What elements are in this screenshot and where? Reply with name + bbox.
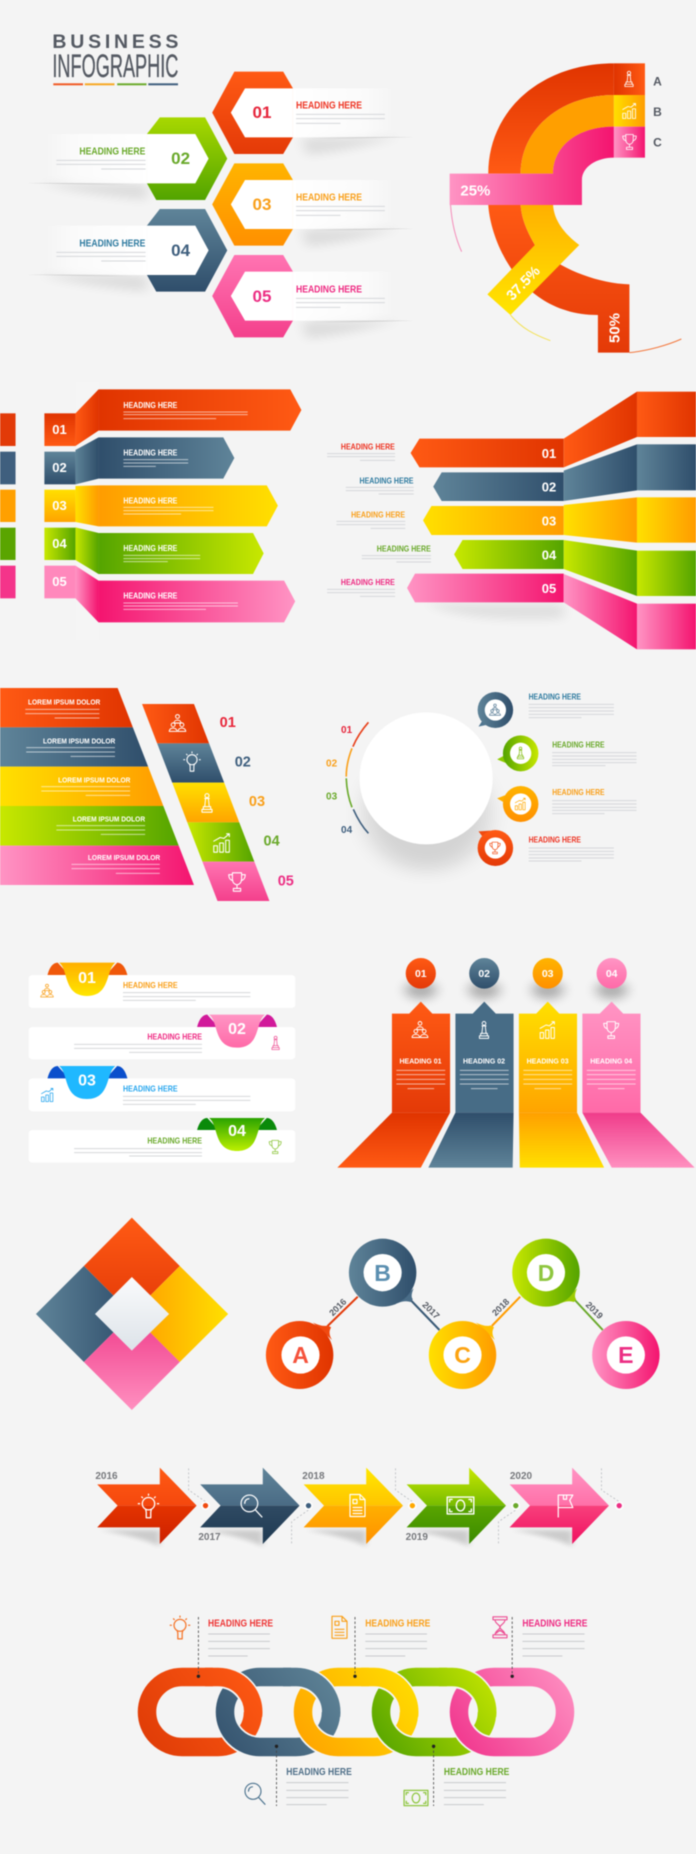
year 2018: 2018 xyxy=(490,1297,511,1318)
icon: growth chart xyxy=(623,104,636,118)
card icon chess xyxy=(272,1036,279,1050)
card heading 2: HEADING HERE xyxy=(147,1032,202,1042)
year 2019: 2019 xyxy=(406,1532,428,1543)
card icon chart xyxy=(42,1088,53,1102)
ribbon heading 1: HEADING HERE xyxy=(123,400,178,410)
chain heading 1: HEADING HERE xyxy=(208,1618,273,1629)
ribbon heading 2: HEADING HERE xyxy=(123,448,178,458)
heading 03: HEADING HERE xyxy=(296,192,362,203)
panel: numbered hexagons xyxy=(27,72,414,339)
bubble icon people xyxy=(489,704,501,715)
number tab 02: 02 xyxy=(52,460,67,475)
year 2020: 2020 xyxy=(510,1471,533,1482)
chain heading 2: HEADING HERE xyxy=(286,1767,352,1778)
strip number 04: 04 xyxy=(264,834,280,850)
number tab 03: 03 xyxy=(52,498,67,513)
column heading 02: HEADING 02 xyxy=(463,1056,505,1065)
strip number 05: 05 xyxy=(278,873,294,889)
bubble icon chart xyxy=(515,798,525,810)
letter B: B xyxy=(374,1260,391,1286)
chain icon bulb xyxy=(170,1616,190,1639)
connector pins xyxy=(197,1617,514,1806)
circle number 02: 02 xyxy=(478,968,490,980)
circle number 03: 03 xyxy=(542,968,554,980)
title: INFOGRAPHIC xyxy=(52,48,178,84)
heading 02: HEADING HERE xyxy=(79,146,146,157)
icon: people xyxy=(169,715,186,731)
bubble icon trophy xyxy=(490,842,500,854)
column icon people xyxy=(412,1022,428,1038)
number 02: 02 xyxy=(171,149,190,168)
number tab 05: 05 xyxy=(52,574,67,589)
panel: circle with speech bubbles xyxy=(326,692,637,870)
title xyxy=(52,31,178,85)
layer label 2: LOREM IPSUM DOLOR xyxy=(43,736,116,746)
layer label 4: LOREM IPSUM DOLOR xyxy=(73,814,146,824)
timeline: arrows xyxy=(95,1468,624,1547)
card heading 3: HEADING HERE xyxy=(123,1084,178,1094)
ribbon number 04: 04 xyxy=(228,1123,246,1140)
ribbon number 03: 03 xyxy=(78,1072,96,1090)
icon: chess tower xyxy=(625,71,633,86)
arrow icon money xyxy=(447,1497,474,1514)
column icon chess xyxy=(479,1022,489,1038)
arc label 04: 04 xyxy=(341,825,353,836)
heading 01: HEADING HERE xyxy=(296,100,362,111)
panel: folded ribbons left xyxy=(0,382,301,640)
right heading 02: HEADING HERE xyxy=(360,475,414,485)
panel: columns with floors xyxy=(337,958,695,1168)
arrow icon bulb xyxy=(138,1494,159,1518)
number 04: 04 xyxy=(171,241,191,260)
right number 03: 03 xyxy=(542,514,556,529)
column heading 01: HEADING 01 xyxy=(400,1056,442,1065)
diagram: four-part diamond xyxy=(36,1218,228,1410)
right number 04: 04 xyxy=(542,547,557,562)
year 2017: 2017 xyxy=(198,1532,221,1543)
year 2019: 2019 xyxy=(584,1300,605,1321)
label C: C xyxy=(653,136,662,150)
card icon trophy xyxy=(269,1140,281,1154)
chain icon money xyxy=(404,1790,428,1806)
letter E: E xyxy=(618,1342,633,1368)
number tab 01: 01 xyxy=(52,422,67,437)
column heading 04: HEADING 04 xyxy=(590,1056,633,1065)
chart: concentric percentage bands xyxy=(450,63,681,353)
number 05: 05 xyxy=(253,287,271,306)
year 2018: 2018 xyxy=(302,1471,325,1482)
layer label 3: LOREM IPSUM DOLOR xyxy=(58,776,131,784)
icon: chart xyxy=(214,834,229,852)
ribbon heading 5: HEADING HERE xyxy=(123,591,178,601)
icon: bulb xyxy=(184,752,200,771)
value 37.5%: 37.5% xyxy=(504,263,544,304)
panel: slanted layers xyxy=(0,688,294,901)
ribbon number 01: 01 xyxy=(78,970,96,987)
heading 05: HEADING HERE xyxy=(296,284,362,295)
arrow icon flag xyxy=(558,1495,573,1517)
bubble heading 3: HEADING HERE xyxy=(552,787,605,797)
chain icon document xyxy=(332,1616,347,1638)
bubble heading 1: HEADING HERE xyxy=(529,692,581,702)
strip number 03: 03 xyxy=(249,794,265,810)
year 2016: 2016 xyxy=(327,1297,348,1318)
panel: ribbon cards xyxy=(29,963,295,1163)
right number 01: 01 xyxy=(542,446,556,461)
layer label 1: LOREM IPSUM DOLOR xyxy=(28,698,101,706)
circle number 04: 04 xyxy=(606,968,618,980)
year 2017: 2017 xyxy=(420,1300,442,1321)
chain icon magnifier xyxy=(245,1783,265,1804)
ribbon number 02: 02 xyxy=(228,1021,246,1038)
number 01: 01 xyxy=(253,103,271,122)
chain links xyxy=(147,1677,565,1747)
right heading 05: HEADING HERE xyxy=(341,577,395,587)
title: BUSINESS xyxy=(52,31,178,53)
right number 05: 05 xyxy=(542,581,556,596)
number 03: 03 xyxy=(253,195,271,214)
value 25%: 25% xyxy=(460,182,490,200)
ribbon heading 4: HEADING HERE xyxy=(123,543,178,553)
card heading 4: HEADING HERE xyxy=(147,1136,202,1146)
icon: trophy xyxy=(623,134,636,150)
bubble icon chess xyxy=(517,747,524,759)
arc label 01: 01 xyxy=(341,725,353,736)
chain timeline xyxy=(147,1616,588,1806)
right number 02: 02 xyxy=(542,480,556,495)
card icon people xyxy=(41,984,53,997)
heading 04: HEADING HERE xyxy=(79,238,146,249)
strip number 02: 02 xyxy=(235,754,251,770)
timeline: lettered bubbles xyxy=(266,1239,660,1389)
label A: A xyxy=(653,74,662,88)
column heading 03: HEADING 03 xyxy=(527,1056,569,1065)
icon: chess xyxy=(202,794,212,812)
letter C: C xyxy=(454,1342,471,1368)
card heading 1: HEADING HERE xyxy=(123,980,178,990)
arrow icon magnifier xyxy=(241,1495,262,1517)
chain heading 4: HEADING HERE xyxy=(444,1767,510,1778)
value 50%: 50% xyxy=(606,313,624,343)
number tab 04: 04 xyxy=(52,536,67,551)
arc label 02: 02 xyxy=(326,758,338,769)
layer label 5: LOREM IPSUM DOLOR xyxy=(88,853,161,862)
ribbon heading 3: HEADING HERE xyxy=(123,495,178,505)
right heading 01: HEADING HERE xyxy=(341,441,395,451)
right heading 03: HEADING HERE xyxy=(351,509,405,519)
right heading 04: HEADING HERE xyxy=(377,543,431,553)
letter A: A xyxy=(292,1342,309,1368)
chain heading 5: HEADING HERE xyxy=(522,1618,588,1629)
chain heading 3: HEADING HERE xyxy=(365,1618,431,1629)
bubble heading 2: HEADING HERE xyxy=(552,739,605,749)
year 2016: 2016 xyxy=(95,1471,118,1482)
column icon chart xyxy=(540,1022,554,1038)
panel: folded ribbons right xyxy=(327,392,696,649)
arrow icon document xyxy=(350,1494,365,1516)
arc label 03: 03 xyxy=(326,792,338,803)
letter D: D xyxy=(538,1260,554,1286)
column icon trophy xyxy=(604,1022,619,1038)
chain icon hourglass xyxy=(493,1617,507,1638)
strip number 01: 01 xyxy=(220,715,236,731)
label B: B xyxy=(653,105,662,119)
circle number 01: 01 xyxy=(415,968,427,980)
icon: trophy xyxy=(229,873,245,891)
bubble heading 4: HEADING HERE xyxy=(529,835,581,845)
